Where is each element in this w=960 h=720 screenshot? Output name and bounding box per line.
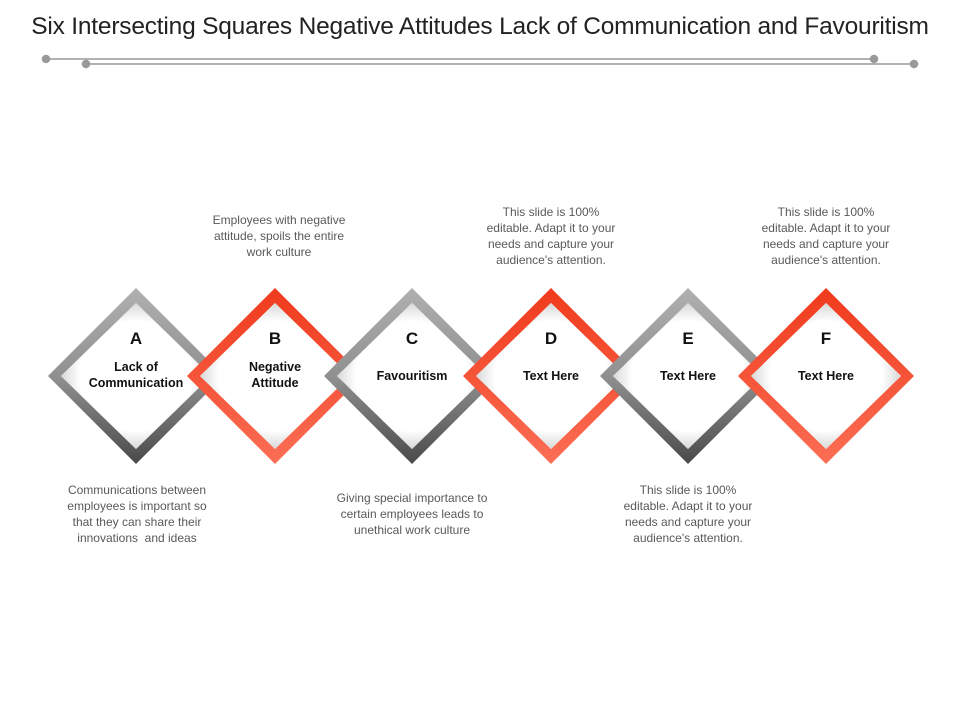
diamond F bbox=[738, 288, 914, 464]
diamond labels bbox=[89, 329, 854, 390]
title: Six Intersecting Squares Negative Attitudes Lack of Communication and Favouritism bbox=[31, 13, 929, 40]
diamond labels: Attitude bbox=[251, 376, 299, 390]
diamond A bbox=[48, 288, 224, 464]
text A: Communications between employees is important so that they can share their innovations and ideas bbox=[67, 483, 207, 545]
diamond labels: B bbox=[269, 329, 281, 348]
diamond labels: F bbox=[821, 329, 831, 348]
diamond labels: D bbox=[545, 329, 557, 348]
diamond labels: Negative bbox=[249, 360, 301, 374]
header lines bbox=[42, 56, 918, 68]
diamond labels: C bbox=[406, 329, 418, 348]
diamond labels: Lack of bbox=[114, 360, 159, 374]
text B: Employees with negative attitude, spoils the entire work culture bbox=[213, 213, 345, 259]
diamond B bbox=[187, 288, 363, 464]
diamond labels: Favouritism bbox=[377, 369, 447, 383]
diamond labels: E bbox=[682, 329, 694, 348]
diamond labels: Communication bbox=[89, 376, 183, 390]
text F: This slide is 100% editable. Adapt it to your needs and capture your audience's attention. bbox=[762, 205, 890, 267]
diamond labels: A bbox=[130, 329, 142, 348]
diamond C bbox=[324, 288, 500, 464]
diamond D bbox=[463, 288, 639, 464]
diamond labels: Text Here bbox=[660, 369, 716, 383]
diamond labels: Text Here bbox=[523, 369, 579, 383]
diamond E bbox=[600, 288, 776, 464]
text E: This slide is 100% editable. Adapt it to your needs and capture your audience's attention. bbox=[624, 483, 752, 545]
diamond labels: Text Here bbox=[798, 369, 854, 383]
text D: This slide is 100% editable. Adapt it to your needs and capture your audience's attention. bbox=[487, 205, 615, 267]
text C: Giving special importance to certain employees leads to unethical work culture bbox=[337, 491, 487, 537]
